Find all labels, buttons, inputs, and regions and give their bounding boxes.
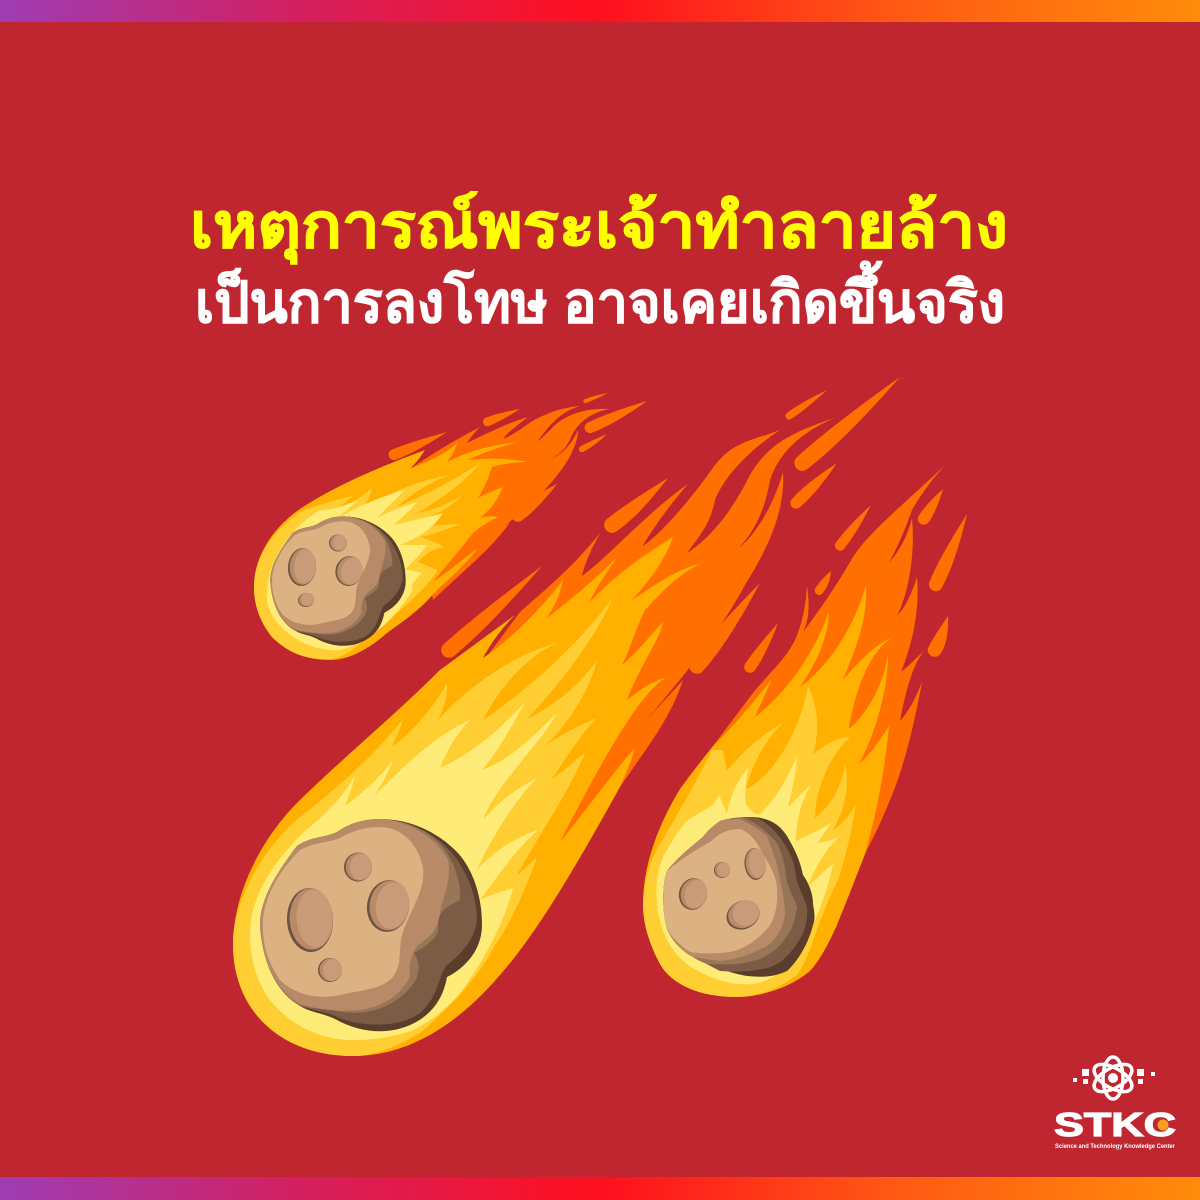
meteor: large lower left: [233, 377, 900, 1056]
icon: pixel squares: [1073, 1069, 1155, 1084]
logo: STKC: [1054, 1057, 1176, 1150]
rock: large meteor: [260, 819, 482, 1031]
title line 1: เหตุการณ์พระเจ้าทำลายล้าง: [190, 191, 1008, 264]
flames: large meteor: [233, 377, 900, 1056]
bottom gradient bar: [0, 1177, 1200, 1200]
logo tagline: Science and Technology Knowledge Center: [1055, 1144, 1176, 1150]
title: [190, 191, 1008, 335]
top gradient bar: [0, 0, 1200, 22]
logo wordmark: STKC: [1054, 1106, 1176, 1143]
title line 2: เป็นการลงโทษ อาจเคยเกิดขึ้นจริง: [195, 261, 1005, 335]
flames: small meteor: [254, 393, 647, 660]
rock: small meteor: [270, 516, 406, 646]
flames: right meteor: [643, 462, 967, 997]
logo orange dot: [1158, 1120, 1168, 1130]
meteor: lower right: [643, 462, 967, 997]
icon: atom: [1090, 1057, 1136, 1099]
meteor: small upper left: [254, 393, 647, 660]
rock: right meteor: [663, 817, 814, 977]
